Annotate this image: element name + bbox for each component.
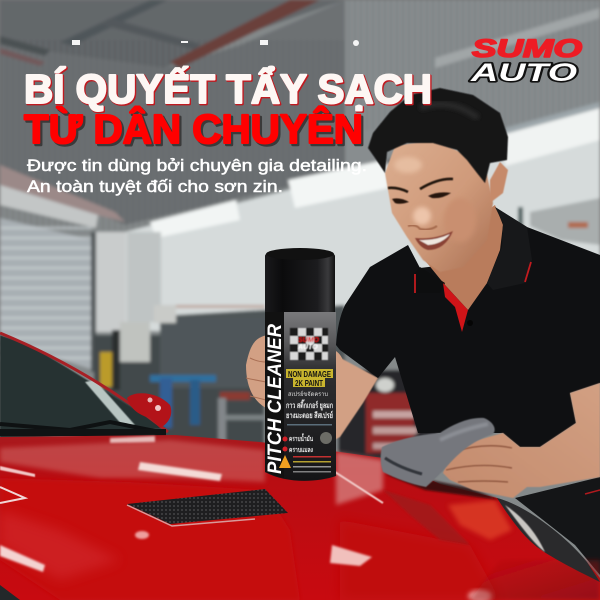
back wall bbox=[125, 110, 600, 345]
checkered flag logo: AUTO bbox=[297, 344, 318, 351]
bottle Thai text and details: สเปรย์ขจัดคราบ bbox=[288, 390, 328, 398]
logo: Sumo Auto: SUMO bbox=[472, 35, 583, 63]
bottle Thai text and details: คราบน้ำมัน bbox=[289, 432, 313, 443]
man: forearm, hand and towel on the hood bbox=[381, 383, 600, 500]
product: spray can bbox=[246, 248, 344, 481]
cap bbox=[265, 248, 335, 312]
hood body bbox=[0, 435, 600, 600]
bottle Thai text and details: ยางมะตอย สีสเปรย์ bbox=[286, 410, 333, 420]
face bbox=[385, 140, 493, 272]
stray white marks at top bbox=[72, 40, 359, 46]
white reflections bbox=[0, 487, 25, 503]
line 2: TỪ DÂN CHUYÊN bbox=[24, 106, 363, 152]
collar with red trim bbox=[415, 207, 532, 332]
logo: Sumo Auto: AUTO bbox=[469, 59, 578, 87]
right hood reflections bbox=[336, 452, 383, 505]
lower hood soft bands bbox=[0, 510, 120, 580]
line 1: BÍ QUYẾT TẨY SẠCH bbox=[25, 66, 433, 113]
ear bbox=[490, 162, 508, 203]
smile bbox=[415, 231, 453, 250]
line 2: TỪ DÂN CHUYÊN bbox=[26, 108, 365, 154]
wipers bbox=[0, 422, 160, 432]
white light bands on right wall bbox=[505, 102, 600, 134]
workshop equipment bbox=[94, 305, 266, 450]
torso: black polo shirt bbox=[336, 207, 600, 447]
arm holding the bottle bbox=[325, 355, 378, 445]
yellow badge: 2K PAINT bbox=[295, 378, 324, 388]
checkered flag logo: SUMO bbox=[298, 337, 320, 344]
headlight bbox=[497, 498, 600, 582]
bottle Thai text and details: กาว สติ๊กเกอร์ ยูลมก bbox=[286, 399, 333, 411]
nose bbox=[408, 225, 437, 230]
bottle Thai text and details: คราบแมลง bbox=[289, 447, 313, 454]
yellow badge bbox=[286, 369, 333, 388]
red car bbox=[0, 333, 600, 600]
hair bbox=[368, 88, 508, 183]
side mirror bbox=[127, 393, 171, 428]
windshield bbox=[0, 335, 165, 440]
ceiling and steel beams bbox=[0, 0, 600, 230]
line 1: BÍ QUYẾT TẨY SẠCH bbox=[24, 65, 432, 112]
red tool cabinet bbox=[338, 370, 438, 460]
headline bbox=[24, 65, 433, 154]
bottle Thai text and details bbox=[279, 390, 333, 472]
checkered flag logo bbox=[290, 328, 328, 360]
trousers bbox=[515, 477, 600, 575]
neck bbox=[423, 205, 503, 310]
yellow badge: NON DAMAGE bbox=[288, 370, 332, 379]
subheading: Được tin dùng bởi chuyên gia detailing. bbox=[27, 156, 367, 175]
vertical product name bbox=[265, 312, 284, 478]
eyes and brows bbox=[388, 179, 453, 204]
hood vent bbox=[127, 489, 288, 526]
left wall strip bbox=[0, 165, 125, 222]
upper hood reflections bbox=[0, 440, 265, 482]
subheading: An toàn tuyệt đối cho sơn zin. bbox=[27, 177, 283, 196]
towel bbox=[381, 418, 495, 487]
product: spray can: PITCH CLEANER bbox=[265, 324, 286, 474]
shadow under towel and hand bbox=[385, 474, 500, 500]
roller door bbox=[0, 218, 96, 372]
label bbox=[265, 312, 336, 481]
man: body and head bbox=[325, 88, 600, 575]
fingers bbox=[246, 335, 268, 408]
logo: Sumo Auto bbox=[469, 35, 583, 87]
forearm and hand bbox=[443, 383, 600, 498]
subheading bbox=[27, 156, 367, 196]
